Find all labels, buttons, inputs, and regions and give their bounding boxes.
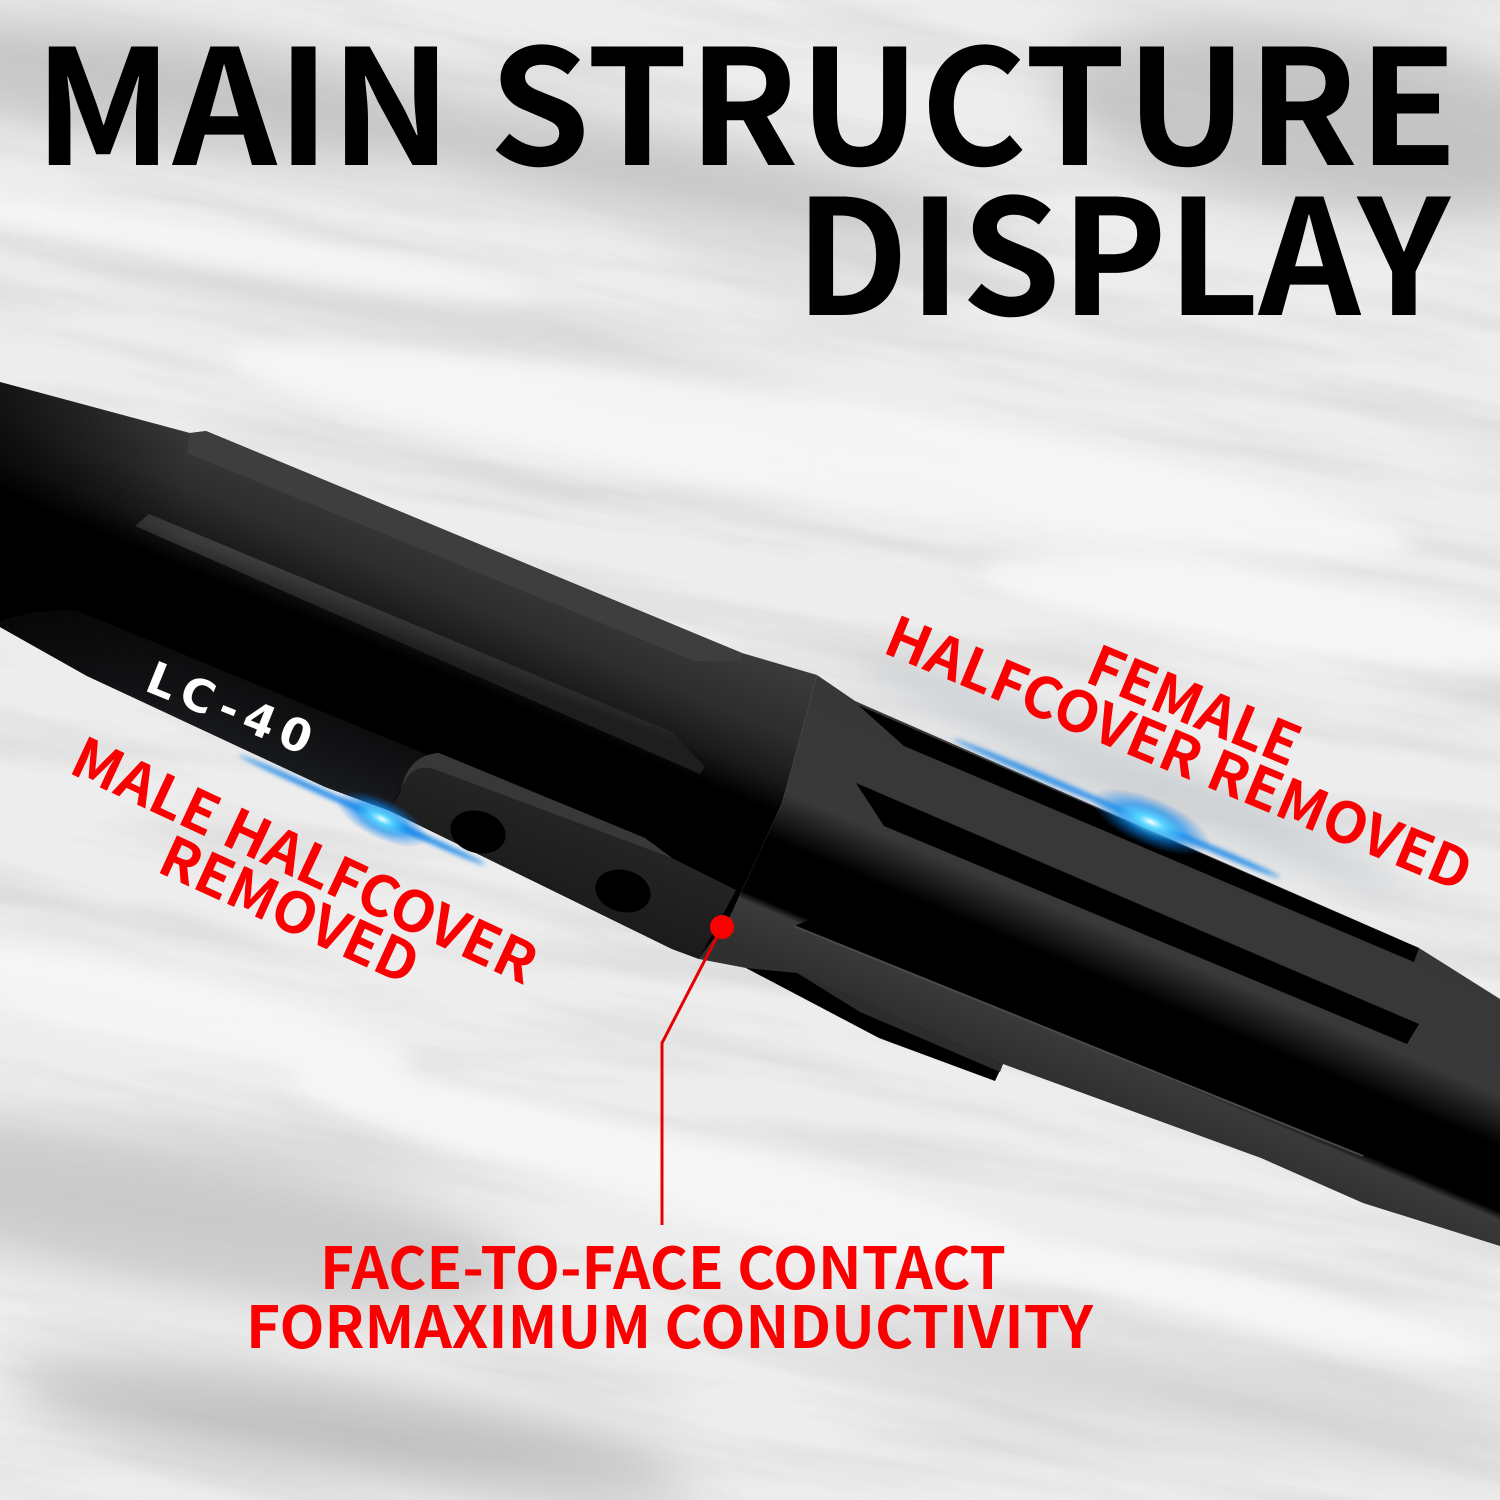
connector: male half body xyxy=(0,382,817,959)
callout: face-to-face contact: FORMAXIMUM CONDUCTIVITY xyxy=(246,1281,1094,1365)
contact hole xyxy=(446,804,510,860)
callout: face-to-face contact: FACE-TO-FACE CONTACT xyxy=(320,1222,1006,1306)
male contact plate xyxy=(390,753,736,959)
lower seam panel xyxy=(0,610,440,811)
icon: blue glow right xyxy=(952,736,1281,880)
contact hole xyxy=(591,863,655,919)
connector: female half body xyxy=(699,675,1500,1246)
model label LC-40: LC-40 xyxy=(139,651,320,765)
callout: male halfcover removed: MALE HALFCOVER xyxy=(60,714,552,1001)
halo behind female half xyxy=(842,630,1418,920)
callout: face-to-face contact xyxy=(246,1222,1094,1365)
slot 1 xyxy=(858,705,1419,962)
icon: blue glow left xyxy=(238,753,486,867)
male body top raised panel xyxy=(187,431,742,661)
callout: female halfcover removed: HALFCOVER REMOVED xyxy=(874,593,1486,908)
title: DISPLAY xyxy=(795,130,1451,362)
leader line with dot xyxy=(662,915,734,1225)
left tail shading xyxy=(0,382,190,720)
title xyxy=(34,0,1458,362)
male body groove rib xyxy=(135,514,705,774)
callout: male halfcover removed: REMOVED xyxy=(148,813,434,1001)
slot 2 xyxy=(856,783,1419,1044)
slot 3 xyxy=(794,912,1368,1156)
callout: female halfcover removed: FEMALE xyxy=(1076,622,1314,783)
lower fin xyxy=(746,968,1003,1081)
